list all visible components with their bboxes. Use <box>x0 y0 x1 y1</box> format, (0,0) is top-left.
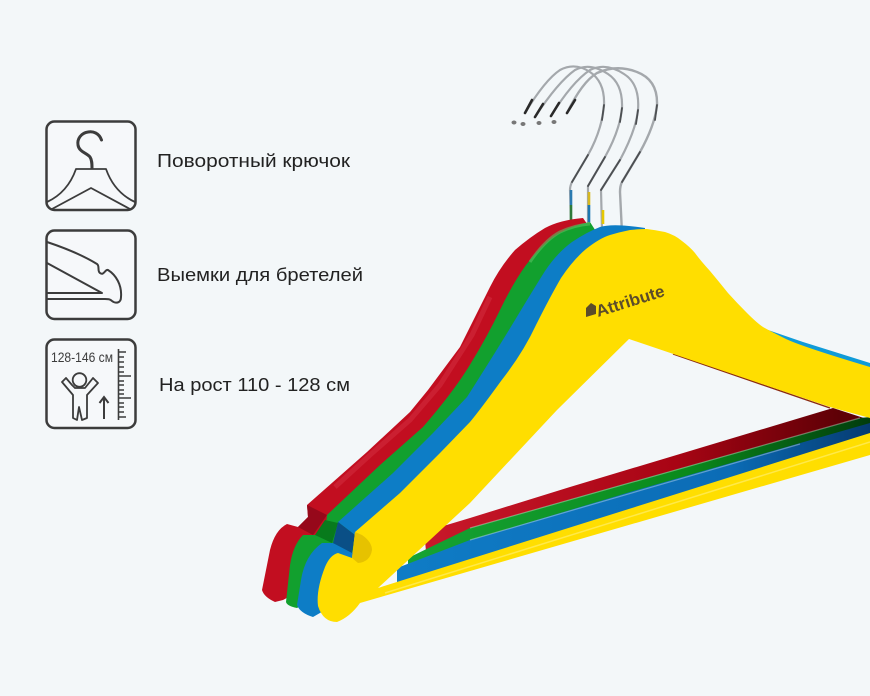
chrome swivel hooks <box>525 66 657 233</box>
green highlight <box>530 224 590 262</box>
green notch recess <box>315 520 338 543</box>
red highlight <box>335 297 490 487</box>
text: strap notches: Выемки для бретелей <box>157 265 363 285</box>
blue bar <box>397 423 870 585</box>
text: height range: На рост 110 - 128 см <box>159 375 350 395</box>
red bar <box>425 408 870 575</box>
red hanger <box>262 218 640 602</box>
bar highlights <box>470 418 860 540</box>
text: swivel hook: Поворотный крючок <box>157 151 350 171</box>
hanger stack photo <box>262 66 870 622</box>
red notch recess <box>298 505 327 535</box>
icon: strap notches <box>46 230 136 319</box>
icon: swivel hook hanger <box>46 122 136 210</box>
yellow hanger <box>318 229 870 622</box>
yellow notch recess <box>352 532 372 563</box>
blue sliver right <box>768 330 870 372</box>
hook tips <box>512 120 556 126</box>
icon: child height: 128-146 см <box>51 350 113 365</box>
green hanger <box>286 222 640 608</box>
yellow bar highlight <box>385 442 870 593</box>
hook base stains <box>571 190 603 224</box>
icon: child height <box>46 340 136 428</box>
red sliver under shoulder <box>673 354 830 408</box>
blue notch recess <box>333 522 355 553</box>
brand logo: Attribute <box>594 282 667 321</box>
blue hanger <box>297 225 645 617</box>
green bar <box>408 417 870 580</box>
